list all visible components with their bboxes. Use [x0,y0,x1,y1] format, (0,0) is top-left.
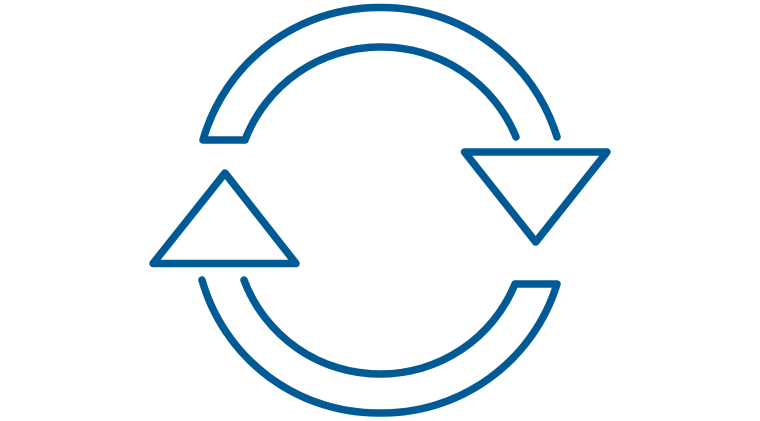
arrow: top curved shaft [203,7,557,140]
arrow: left upward triangle head [153,173,296,264]
arrow: bottom curved shaft [202,280,557,413]
arrow: right downward triangle head [464,152,607,242]
